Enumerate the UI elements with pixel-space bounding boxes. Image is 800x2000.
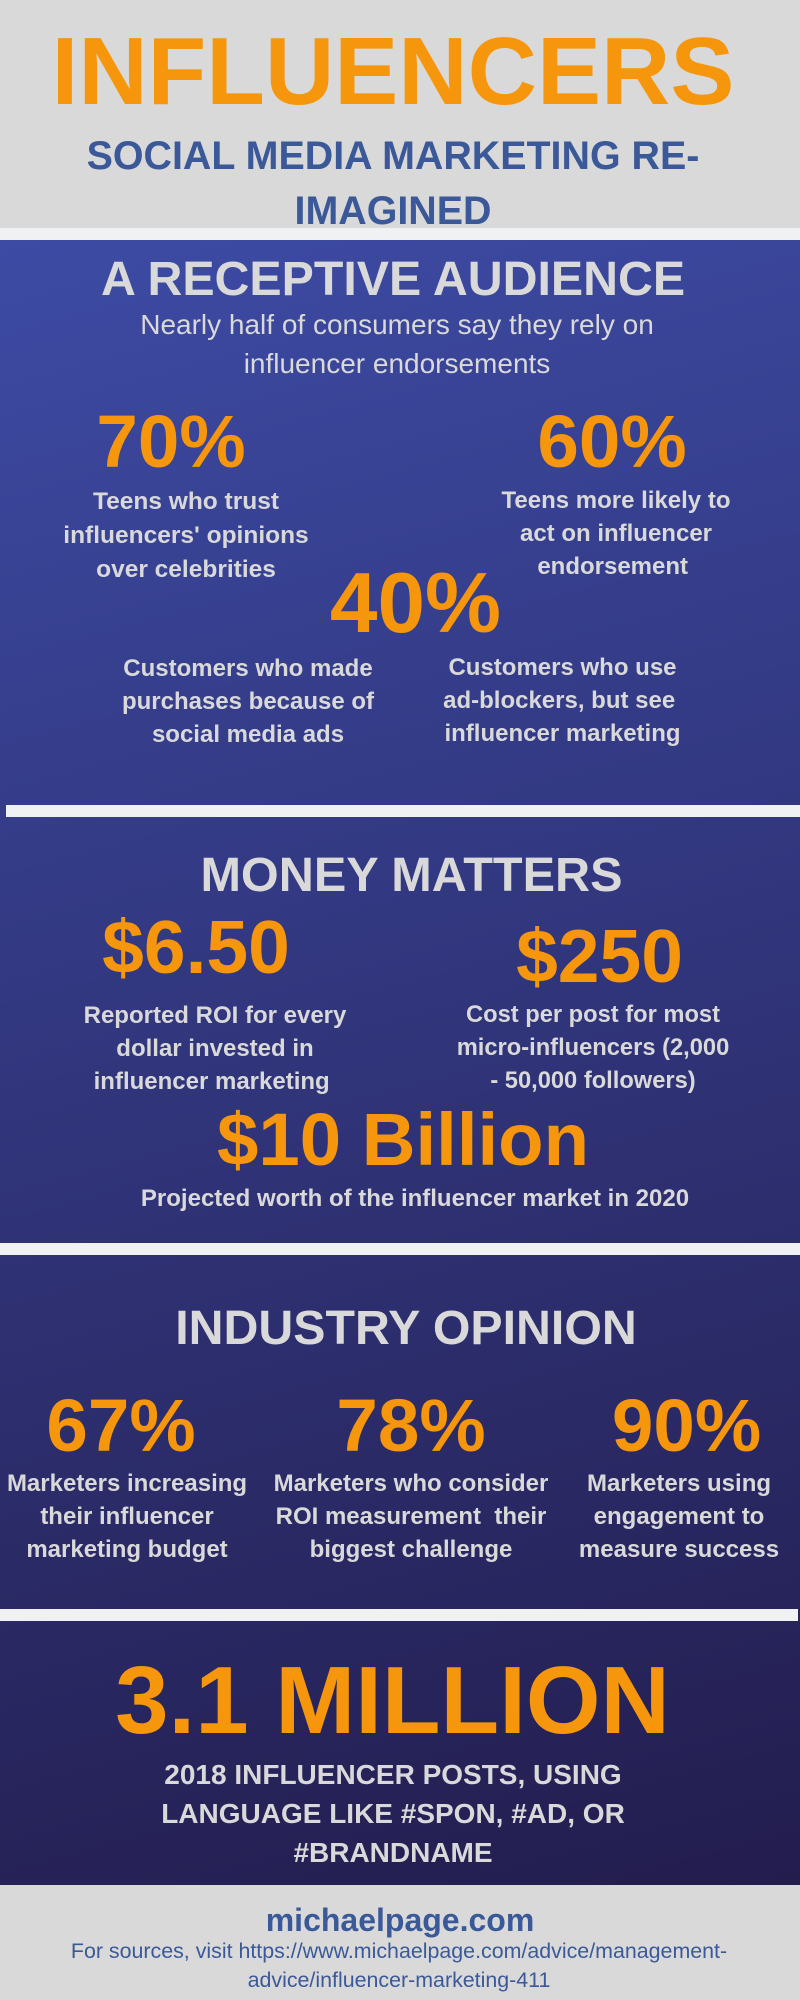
heading: industry opinion: INDUSTRY OPINION bbox=[175, 1301, 637, 1355]
caption: over celebrities bbox=[96, 556, 276, 583]
brand name: michaelpage.com bbox=[266, 1902, 534, 1938]
number: 78% bbox=[336, 1382, 486, 1466]
intro text: influencer endorsements bbox=[244, 348, 550, 378]
caption: customers who made purchases: social media ads bbox=[152, 721, 344, 748]
caption: engagement to bbox=[594, 1503, 764, 1530]
caption: customers who use ad-blockers bbox=[443, 654, 681, 747]
caption: dollar invested in bbox=[116, 1035, 314, 1062]
stat: $10 billion bbox=[141, 1098, 689, 1212]
caption: endorsement bbox=[537, 553, 688, 580]
caption bbox=[457, 1002, 729, 1094]
caption: Projected worth of the influencer market in 2020 bbox=[141, 1185, 689, 1212]
caption bbox=[502, 486, 730, 580]
caption: Cost per post for most bbox=[466, 1002, 720, 1028]
stat: 90% bbox=[579, 1382, 779, 1563]
stat: 78% bbox=[274, 1382, 548, 1563]
number: 60% bbox=[537, 399, 687, 483]
caption: their influencer bbox=[40, 1503, 214, 1530]
intro text bbox=[140, 308, 654, 378]
caption: customers who use ad-blockers: influencer marketing bbox=[444, 720, 681, 747]
panel: industry opinion bbox=[7, 1301, 779, 1563]
caption: Reported ROI for every bbox=[84, 1002, 346, 1028]
caption: influencer marketing bbox=[94, 1068, 330, 1095]
caption: influencer posts: 2018 INFLUENCER POSTS, USING bbox=[164, 1758, 622, 1790]
caption: Marketers who consider bbox=[274, 1470, 548, 1497]
sources text: For sources, visit https://www.michaelpage.com/advice/management- bbox=[71, 1938, 727, 1962]
heading: a receptive audience: A RECEPTIVE AUDIENCE bbox=[101, 252, 685, 306]
caption: influencers' opinions bbox=[63, 522, 309, 549]
heading: money matters: MONEY MATTERS bbox=[200, 848, 623, 902]
caption: influencer posts bbox=[161, 1758, 625, 1868]
caption: ROI measurement their bbox=[276, 1503, 546, 1530]
number: 40%: 40% bbox=[330, 556, 501, 651]
title: INFLUENCERS bbox=[52, 18, 734, 124]
caption: biggest challenge bbox=[310, 1536, 512, 1563]
stat: 67% bbox=[7, 1382, 247, 1563]
subtitle: SOCIAL MEDIA MARKETING RE- bbox=[87, 134, 699, 178]
divider band 2 bbox=[6, 805, 800, 817]
caption: customers who made purchases: Customers who made bbox=[123, 654, 373, 682]
caption: influencer posts: #BRANDNAME bbox=[293, 1836, 493, 1868]
caption: Marketers using bbox=[587, 1470, 771, 1497]
caption: influencer posts: LANGUAGE LIKE #SPON, #AD, OR bbox=[161, 1798, 625, 1828]
stat: $6.50 bbox=[84, 904, 346, 1095]
caption bbox=[63, 488, 309, 583]
stat: 70% bbox=[63, 399, 309, 583]
number: $250 bbox=[516, 914, 683, 998]
caption: measure success bbox=[579, 1536, 779, 1563]
caption bbox=[579, 1470, 779, 1563]
caption: Marketers increasing bbox=[7, 1470, 247, 1497]
caption: Teens more likely to bbox=[502, 486, 730, 514]
caption bbox=[84, 1002, 346, 1095]
divider band 3 bbox=[0, 1243, 800, 1255]
intro text: Nearly half of consumers say they rely on bbox=[140, 308, 654, 340]
caption: customers who made purchases bbox=[122, 654, 374, 748]
caption: customers who use ad-blockers: Customers who use bbox=[448, 654, 677, 681]
number: 70% bbox=[96, 399, 246, 483]
panel: money matters bbox=[84, 848, 729, 1212]
number: 67% bbox=[46, 1382, 196, 1466]
stat: 60% bbox=[502, 399, 730, 580]
subtitle bbox=[87, 134, 699, 233]
caption: marketing budget bbox=[26, 1536, 228, 1563]
number: 90% bbox=[612, 1382, 761, 1466]
footer panel bbox=[0, 1885, 800, 2000]
subtitle: IMAGINED bbox=[295, 189, 491, 233]
caption bbox=[7, 1470, 247, 1563]
caption: Teens who trust bbox=[93, 488, 279, 515]
divider band 4 bbox=[0, 1609, 798, 1621]
caption: customers who use ad-blockers: ad-blockers, but see bbox=[443, 687, 675, 714]
caption: act on influencer bbox=[520, 520, 712, 547]
caption: micro-influencers (2,000 bbox=[457, 1035, 729, 1061]
panel: a receptive audience bbox=[63, 252, 730, 748]
caption bbox=[274, 1470, 548, 1563]
panel: 3.1 million bbox=[115, 1647, 670, 1868]
sources text bbox=[71, 1938, 727, 1992]
sources text: advice/influencer-marketing-411 bbox=[248, 1968, 550, 1992]
caption: customers who made purchases: purchases because of bbox=[122, 688, 374, 715]
stat: $250 bbox=[457, 914, 729, 1094]
number: $6.50 bbox=[102, 904, 290, 988]
caption: - 50,000 followers) bbox=[490, 1068, 696, 1094]
number: 3.1 million: 3.1 MILLION bbox=[115, 1647, 670, 1754]
header panel bbox=[0, 0, 800, 228]
number: $10 Billion bbox=[217, 1098, 589, 1181]
